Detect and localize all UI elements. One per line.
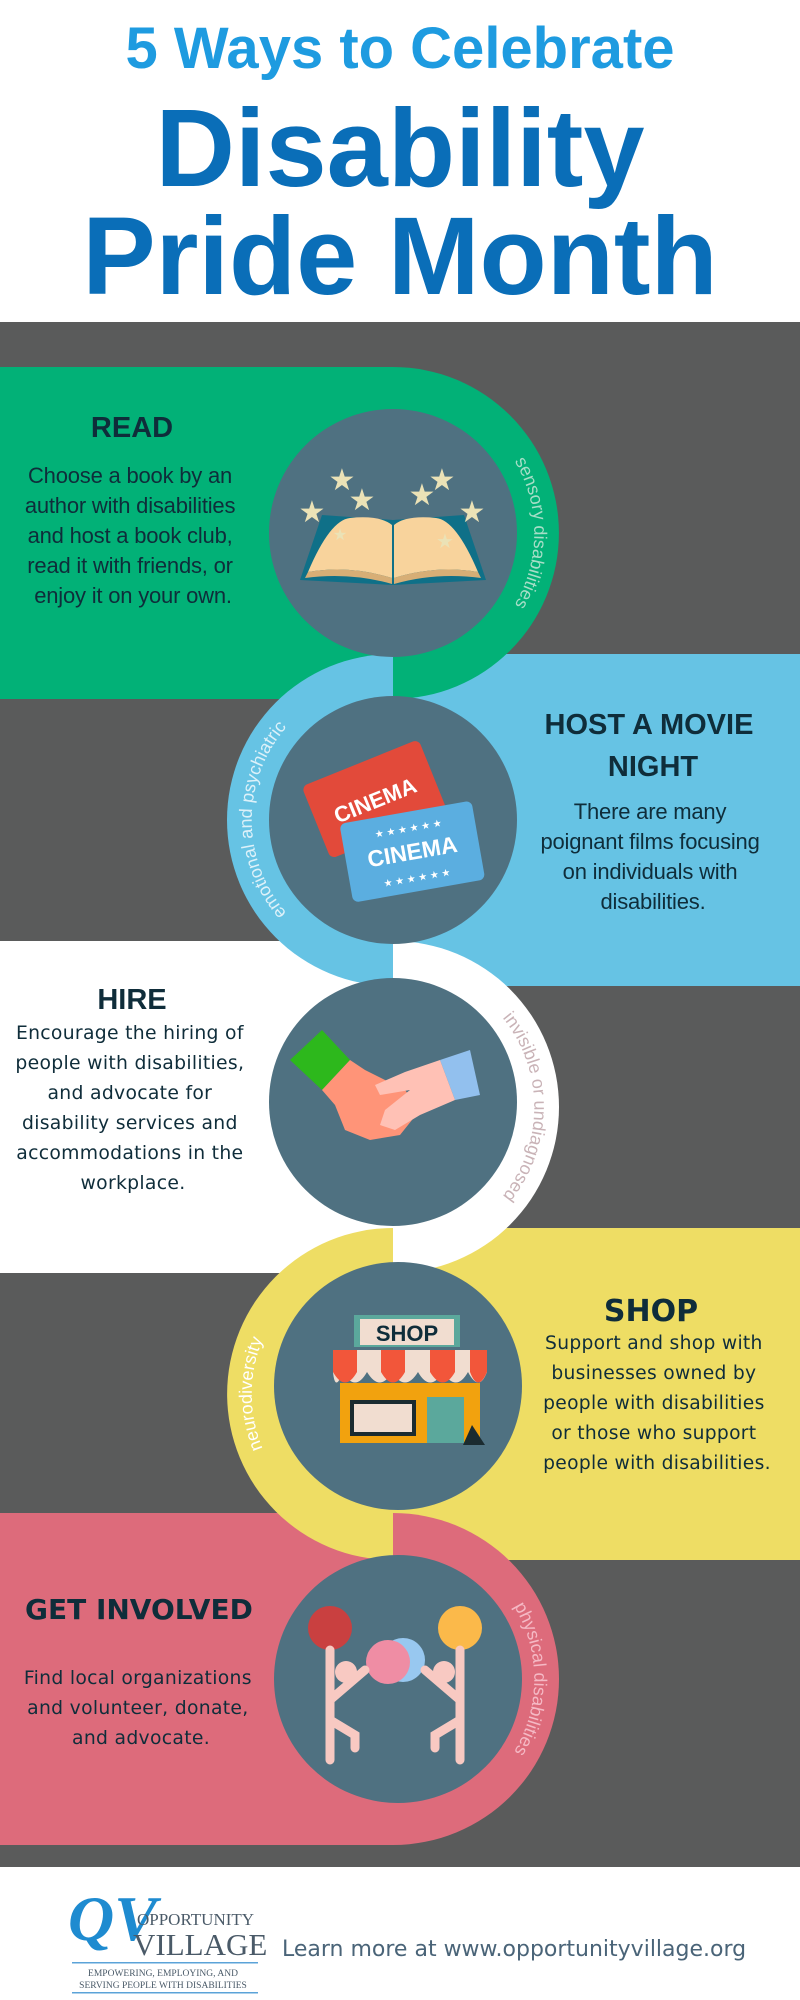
heading: HIRE: HIRE [97, 984, 167, 1016]
icon circle: book [269, 409, 517, 657]
dark background [0, 322, 800, 1867]
icon circle: book: ★ [429, 464, 455, 497]
footer logo: OPPORTUNITY [137, 1910, 254, 1929]
text: shop body: or those who support [551, 1423, 756, 1444]
ring label: sensory disabilities: sensory disabilities [516, 458, 548, 608]
text: read body: Choose a book by an [28, 463, 232, 488]
heading: host a movie night: NIGHT [608, 751, 698, 783]
icon circle: tickets: ★ ★ ★ ★ ★ ★ [383, 867, 451, 890]
text: movie body: on individuals with [563, 859, 737, 884]
title [82, 16, 718, 318]
panel: read [25, 409, 548, 657]
panel: shop [238, 1262, 771, 1510]
ring label: emotional and psychiatric: emotional and psychiatric [238, 722, 286, 917]
footer logo: EMPOWERING, EMPLOYING, AND [88, 1969, 238, 1979]
icon circle: shop: SHOP [376, 1321, 438, 1346]
band rects [0, 367, 393, 699]
icon circle: book: ★ [333, 527, 347, 544]
text: hire body: disability services and [22, 1113, 238, 1134]
icon circle: cheerleaders [274, 1555, 522, 1803]
text: read body: and host a book club, [28, 523, 233, 548]
text: involved body: and advocate. [72, 1728, 210, 1749]
footer link text: Learn more at www.opportunityvillage.org [282, 1937, 746, 1962]
text: movie body: There are many [574, 799, 726, 824]
text: read body: read it with friends, or [27, 553, 233, 578]
text: read body: enjoy it on your own. [34, 583, 232, 608]
title: 5 Ways to Celebrate [125, 16, 675, 81]
icon circle: shop [274, 1262, 522, 1510]
title: Disability [155, 87, 645, 210]
text: shop body: businesses owned by [551, 1363, 756, 1384]
ring label: physical disabilities: physical disabilities [511, 1602, 548, 1755]
icon circle: tickets: CINEMA [365, 831, 459, 872]
text: read body: author with disabilities [25, 493, 235, 518]
panel: get involved [24, 1555, 548, 1803]
text: hire body: workplace. [81, 1173, 185, 1194]
icon circle: book: ★ [436, 531, 454, 553]
icon circle: book: ★ [459, 496, 485, 529]
icon circle: book: ★ [299, 496, 325, 529]
icon circle: book: ★ [409, 479, 435, 512]
text: shop body: people with disabilities [543, 1393, 765, 1414]
footer logo: QV [68, 1883, 162, 1954]
text: involved body: Find local organizations [24, 1668, 252, 1689]
icon circle: book: ★ [349, 484, 375, 517]
title: Pride Month [82, 195, 718, 318]
half disks [393, 367, 559, 699]
text: movie body: disabilities. [600, 889, 706, 914]
footer logo: VILLAGE [133, 1927, 267, 1962]
text: hire body: Encourage the hiring of [16, 1023, 244, 1044]
text: hire body: accommodations in the [16, 1143, 243, 1164]
text: shop body: Support and shop with [545, 1333, 763, 1354]
text: hire body: people with disabilities, [15, 1053, 244, 1074]
footer logo [68, 1883, 267, 1994]
text: movie body: poignant films focusing [540, 829, 760, 854]
heading: SHOP: SHOP [604, 1294, 698, 1329]
icon circle: tickets [269, 696, 517, 944]
icon circle: tickets: CINEMA [330, 773, 420, 828]
text: involved body: and volunteer, donate, [27, 1698, 249, 1719]
ring label: neurodiversity: neurodiversity [238, 1336, 264, 1451]
footer logo: SERVING PEOPLE WITH DISABILITIES [79, 1981, 247, 1991]
icon circle: handshake [269, 978, 517, 1226]
heading: host a movie night: HOST A MOVIE [545, 709, 753, 741]
icon circle: tickets: ★ ★ ★ ★ ★ ★ [374, 818, 443, 841]
ring label: invisible or undiagnosed: invisible or undiagnosed [503, 1010, 546, 1204]
panel: hire [15, 978, 546, 1226]
panel: movie night [238, 696, 760, 944]
text: hire body: and advocate for [48, 1083, 212, 1104]
heading: READ: READ [91, 412, 173, 444]
icon circle: book: ★ [329, 464, 355, 497]
text: shop body: people with disabilities. [543, 1453, 771, 1474]
heading: GET INVOLVED: GET INVOLVED [25, 1593, 253, 1626]
